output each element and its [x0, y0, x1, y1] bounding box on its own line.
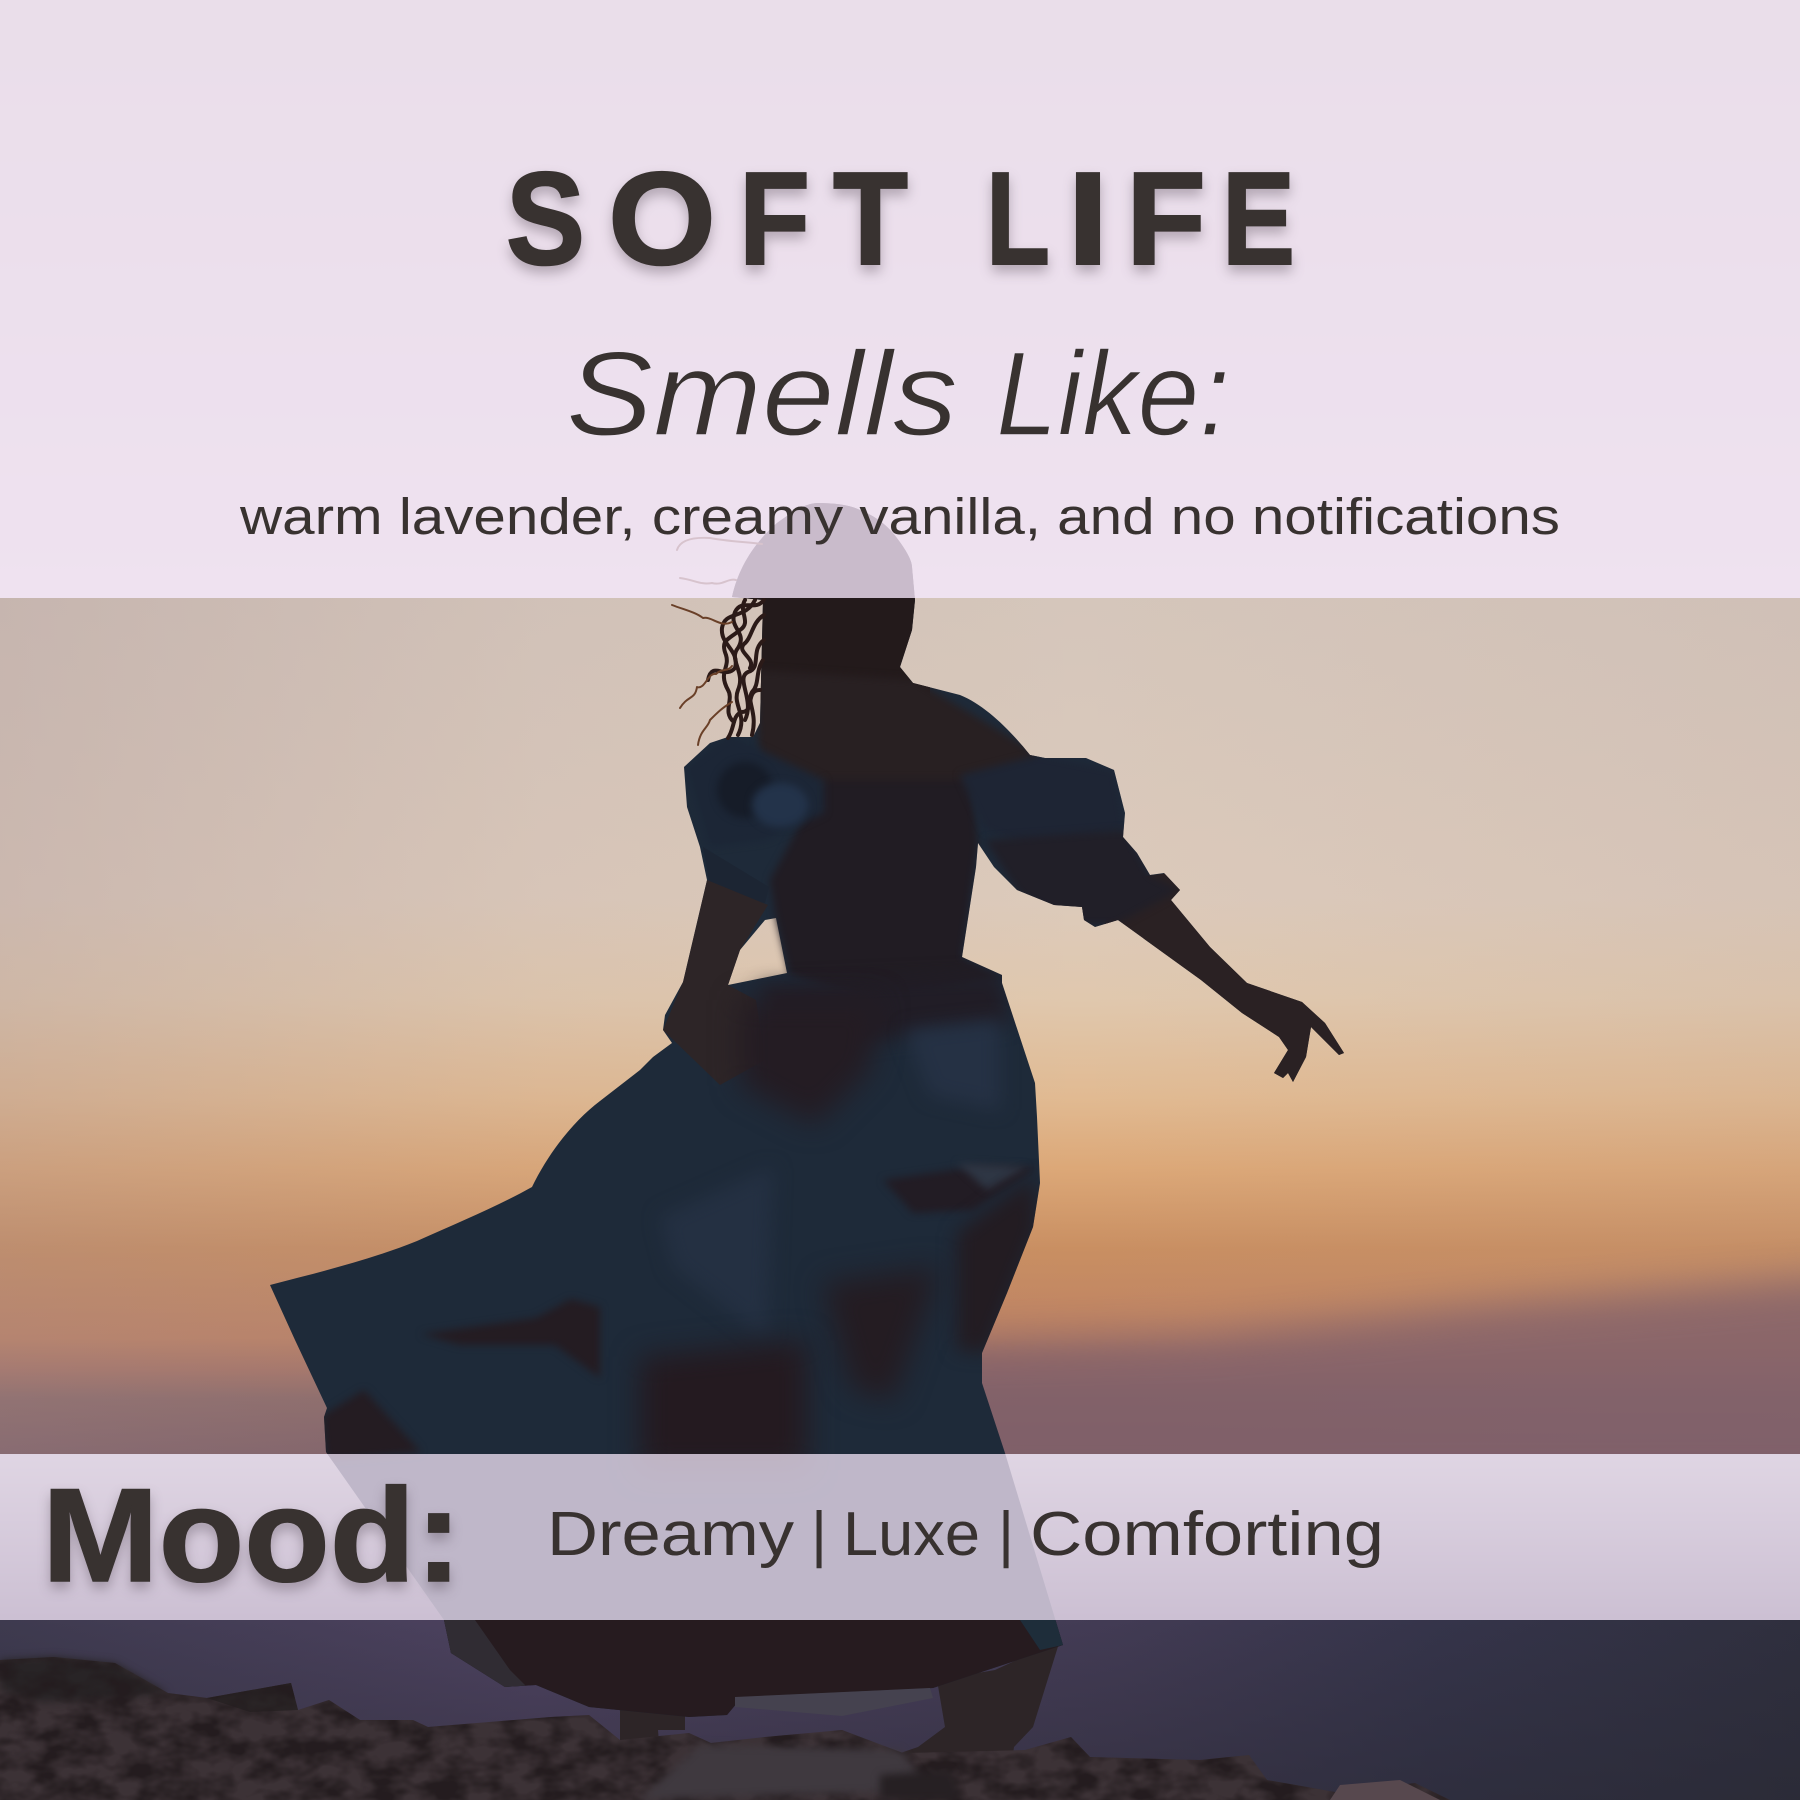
dress hem: [444, 1620, 1063, 1717]
right arm: [1105, 874, 1344, 1082]
hair curls: [708, 600, 764, 738]
title: E: [1222, 145, 1295, 292]
mood values: |: [998, 1500, 1014, 1569]
title: [506, 145, 1295, 292]
left sleeve: [688, 738, 824, 820]
legs and feet: [620, 1640, 1060, 1775]
title: O: [608, 145, 716, 292]
description line: warm lavender, creamy vanilla, and no notifications: [239, 488, 1560, 545]
distant sea below horizon: [0, 1620, 1800, 1800]
title: L: [986, 145, 1050, 292]
mood values: Luxe: [843, 1500, 980, 1569]
dress shading: [322, 490, 1360, 1730]
mood values: Comforting: [1030, 1500, 1384, 1569]
subtitle: Smells Like: Like:: [996, 327, 1230, 461]
title: F: [1126, 145, 1206, 292]
title: S: [506, 145, 585, 292]
mood values: Dreamy: [547, 1500, 794, 1569]
title: I: [1067, 145, 1109, 292]
panel: top translucent header: [0, 0, 1800, 598]
mood values: |: [811, 1500, 827, 1569]
title: F: [739, 145, 810, 292]
right sleeve: [962, 755, 1125, 830]
rocks in foreground: [0, 1657, 1450, 1800]
skirt folds: [753, 969, 1014, 1040]
figure: woman in dress silhouette: [270, 490, 1360, 1775]
mood heading: Mood:: [42, 1462, 462, 1610]
title: T: [833, 145, 908, 292]
petticoat: [735, 1688, 933, 1716]
dress body and torso: [270, 503, 1344, 1717]
subtitle: Smells Like: Smells: [566, 327, 958, 461]
rock texture: [0, 1657, 1450, 1800]
head and back: [732, 503, 930, 700]
background photo: sunset sky: [0, 598, 1800, 1490]
panel: mood band: [0, 1454, 1800, 1620]
left arm and hand: [663, 880, 768, 1085]
torso: [770, 792, 996, 984]
